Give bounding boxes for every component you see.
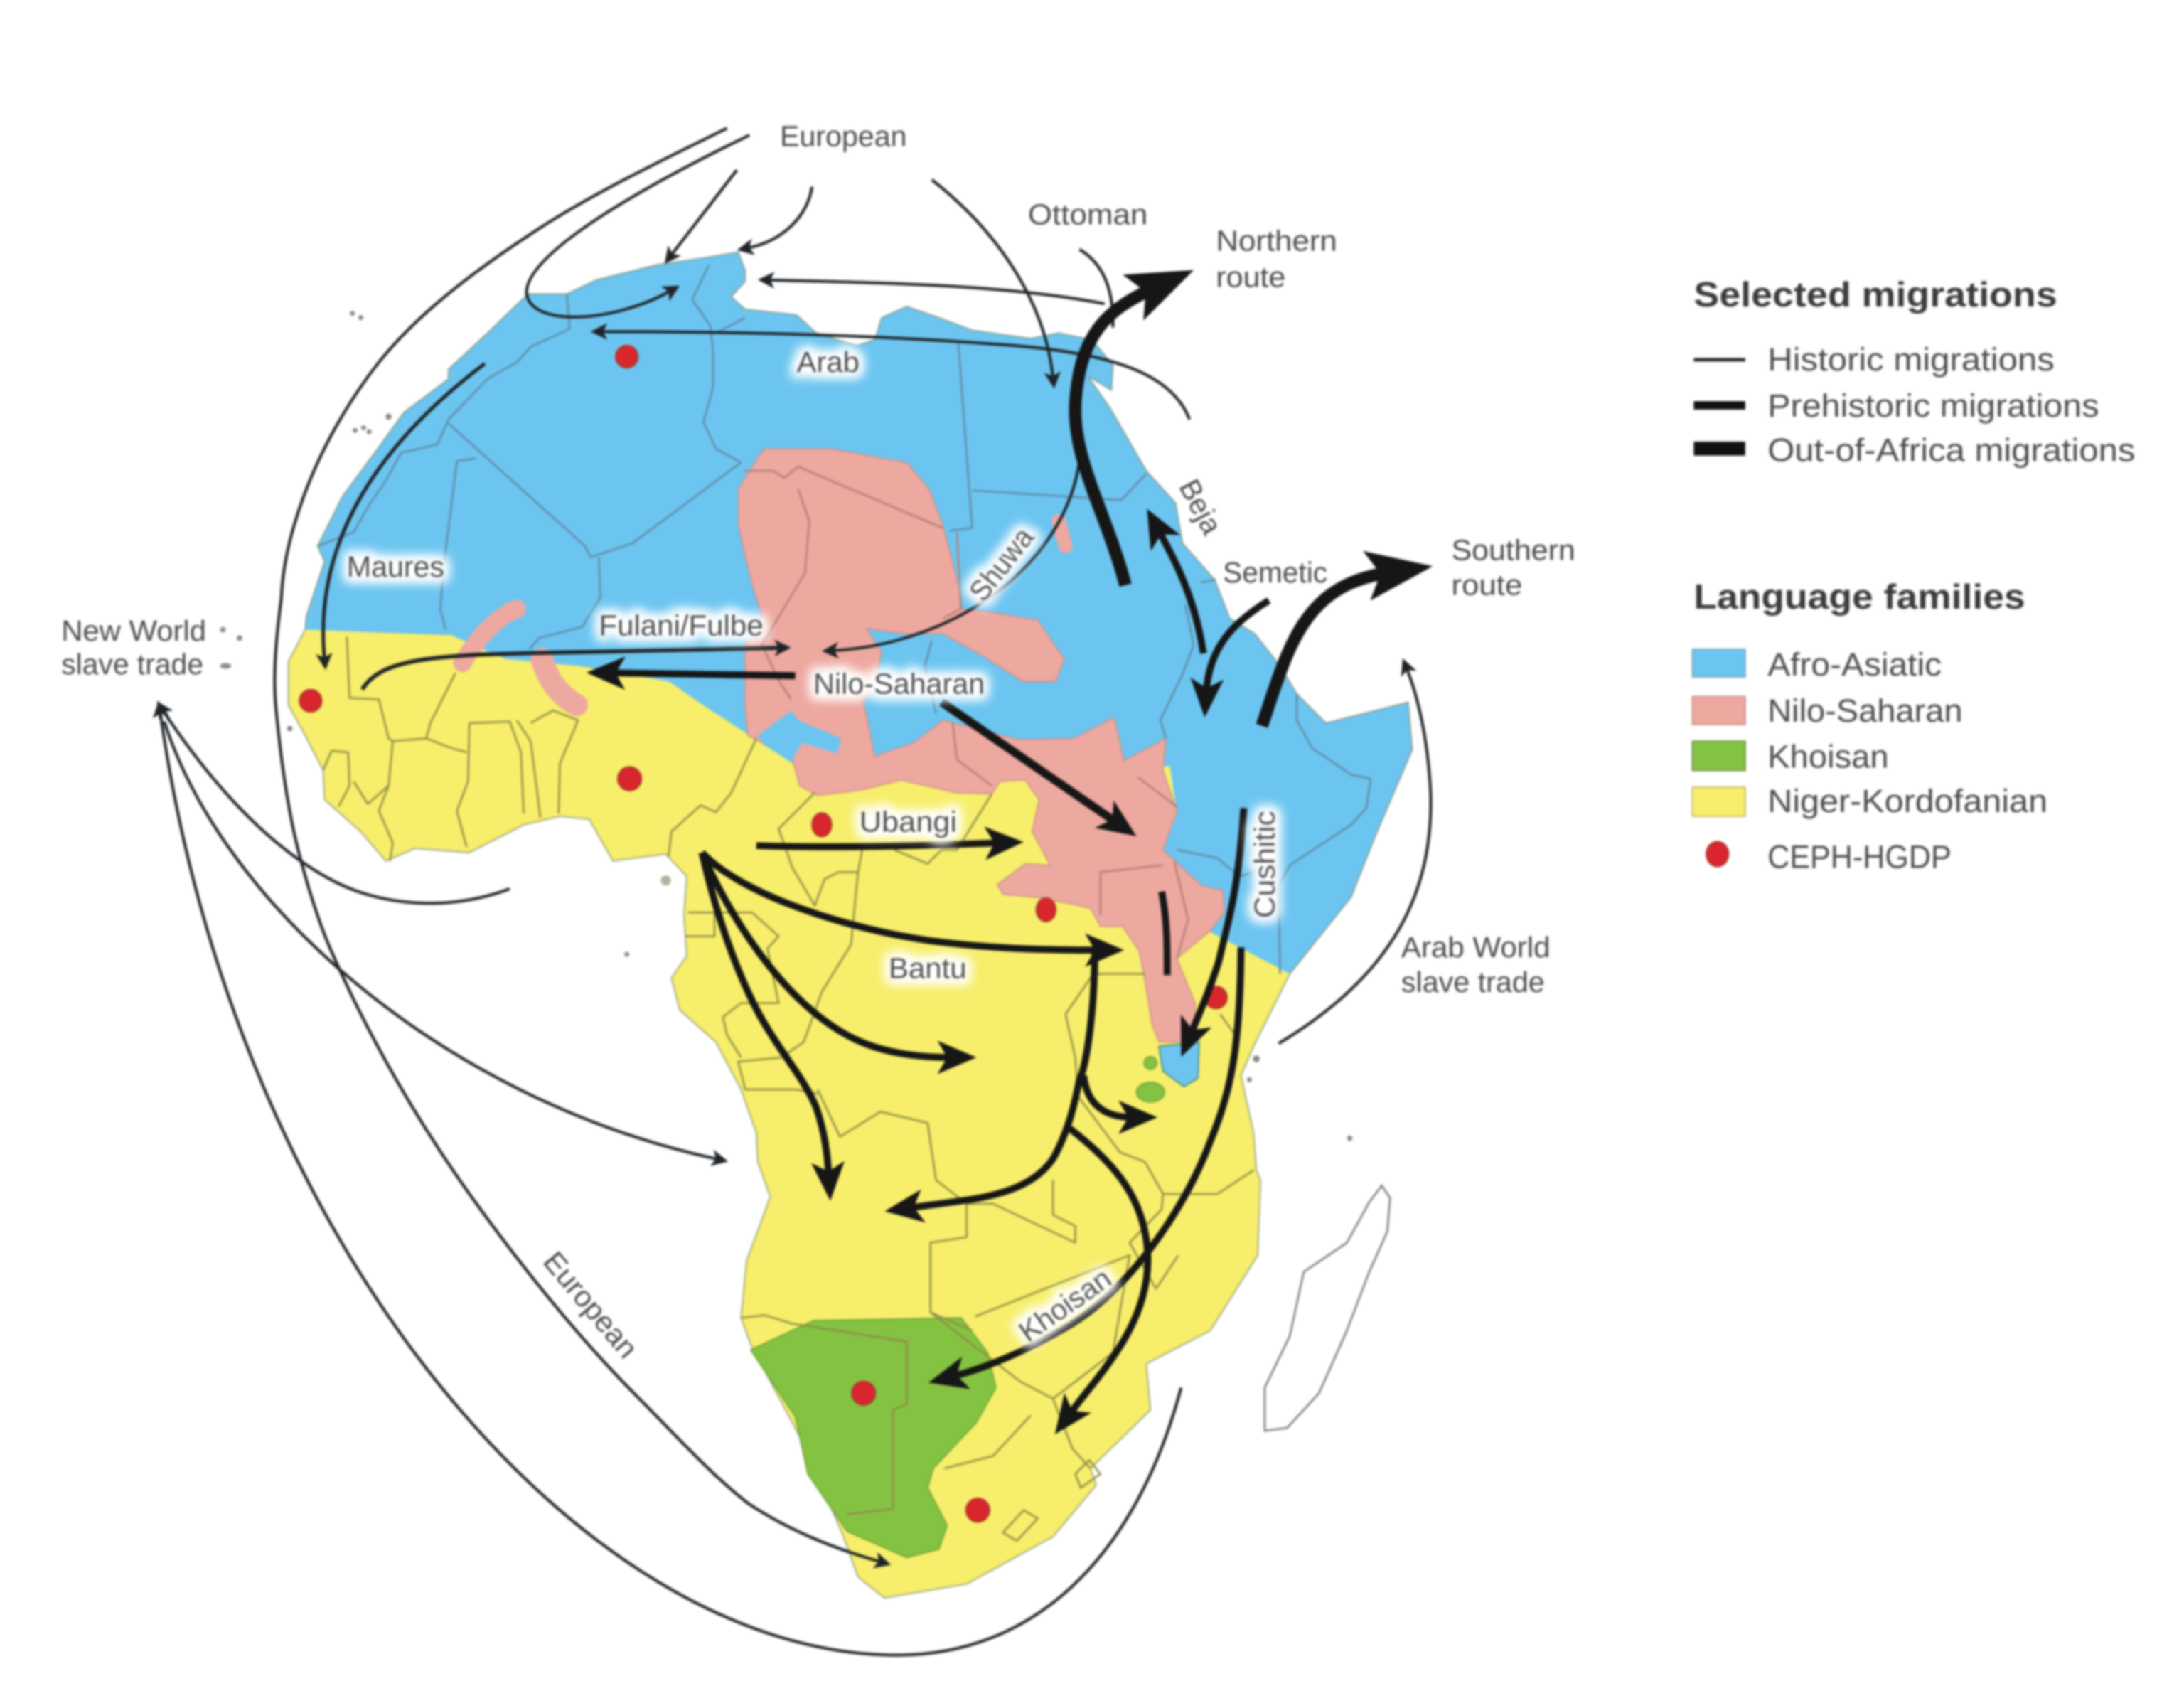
legend item: Khoisan [1692, 739, 1889, 775]
coastline outline [289, 252, 1413, 1598]
region: Nilo-Saharan (pink) [738, 449, 1224, 1042]
label: Arab World slave trade: Arab World [1401, 931, 1551, 964]
borders: West and Central Africa [323, 636, 1253, 1541]
small islands [220, 311, 1352, 1141]
region: Afro-Asiatic (blue) [264, 237, 1449, 973]
legend item: Nilo-Saharan [1692, 693, 1962, 729]
heading: Selected migrations: Selected migrations [1693, 276, 2057, 314]
arrows: historic migrations [160, 128, 1430, 1655]
label: Bantu: Bantu [889, 951, 967, 984]
label: Semetic: Semetic [1223, 556, 1327, 589]
label: New World slave trade: slave trade [61, 648, 203, 681]
label: Shuwa: Shuwa [963, 521, 1040, 607]
arrows: prehistoric migrations [611, 530, 1269, 1414]
label: New World slave trade: New World [61, 614, 206, 647]
map of Africa [220, 237, 1449, 1616]
label: New World slave trade [61, 614, 206, 681]
label: Southern route: Southern [1451, 534, 1575, 567]
label: Fulani/Fulbe: Fulani/Fulbe [599, 609, 764, 641]
label: Arab World slave trade: slave trade [1401, 966, 1545, 998]
label: Ottoman: Ottoman [1028, 198, 1147, 230]
legend: selected migrations [1693, 276, 2135, 468]
label: Maures: Maures [347, 550, 444, 583]
legend item: historic: Historic migrations [1767, 341, 2055, 378]
label: European (north): European [780, 120, 906, 153]
label: Southern route: route [1451, 569, 1522, 602]
label: Ubangi: Ubangi [860, 806, 957, 838]
region: Niger-Kordofanian (yellow landmass) [287, 628, 1291, 1599]
legend item: Afro-Asiatic: Afro-Asiatic [1767, 646, 1942, 683]
label: Nilo-Saharan: Nilo-Saharan [813, 668, 985, 700]
label: Southern route [1451, 534, 1575, 602]
region: small Nilo-Saharan pockets [462, 521, 1066, 705]
map labels [61, 120, 1575, 1365]
label: European (south): European [537, 1245, 644, 1365]
label: Arab: Arab [797, 346, 860, 378]
heading: Language families: Language families [1693, 578, 2025, 617]
label: Beja: Beja [1173, 474, 1228, 540]
icon: Madagascar outline [1265, 1185, 1390, 1431]
label: Northern route [1216, 225, 1337, 294]
borders: Nilo-Saharan zone [744, 466, 1188, 959]
region: Lake Chad area (blue) [758, 710, 841, 761]
label: Northern route: Northern [1216, 225, 1337, 257]
legend item: Afro-Asiatic [1692, 646, 1942, 683]
sample points: CEPH-HGDP dots [299, 346, 1227, 1522]
legend: language families [1692, 578, 2048, 875]
arrows: out-of-Africa migrations [1075, 289, 1388, 726]
legend item: prehistoric: Prehistoric migrations [1767, 388, 2099, 424]
legend item: Khoisan: Khoisan [1767, 739, 1889, 775]
region: Khoisan (green) [751, 1057, 1165, 1557]
label: Arab World slave trade [1401, 931, 1551, 998]
label: Cushitic: Cushitic [1248, 811, 1281, 918]
legend item: CEPH-HGDP: CEPH-HGDP [1767, 839, 1952, 875]
region: Lake Victoria area (blue) [1159, 1042, 1199, 1087]
legend item: Nilo-Saharan: Nilo-Saharan [1767, 693, 1962, 729]
legend item: out of Africa: Out-of-Africa migrations [1767, 432, 2135, 468]
label: Northern route: route [1216, 261, 1285, 294]
label: Khoisan: Khoisan [1013, 1261, 1117, 1348]
legend item: Niger-Kordofanian: Niger-Kordofanian [1767, 783, 2048, 819]
borders: northern countries [318, 265, 1371, 973]
